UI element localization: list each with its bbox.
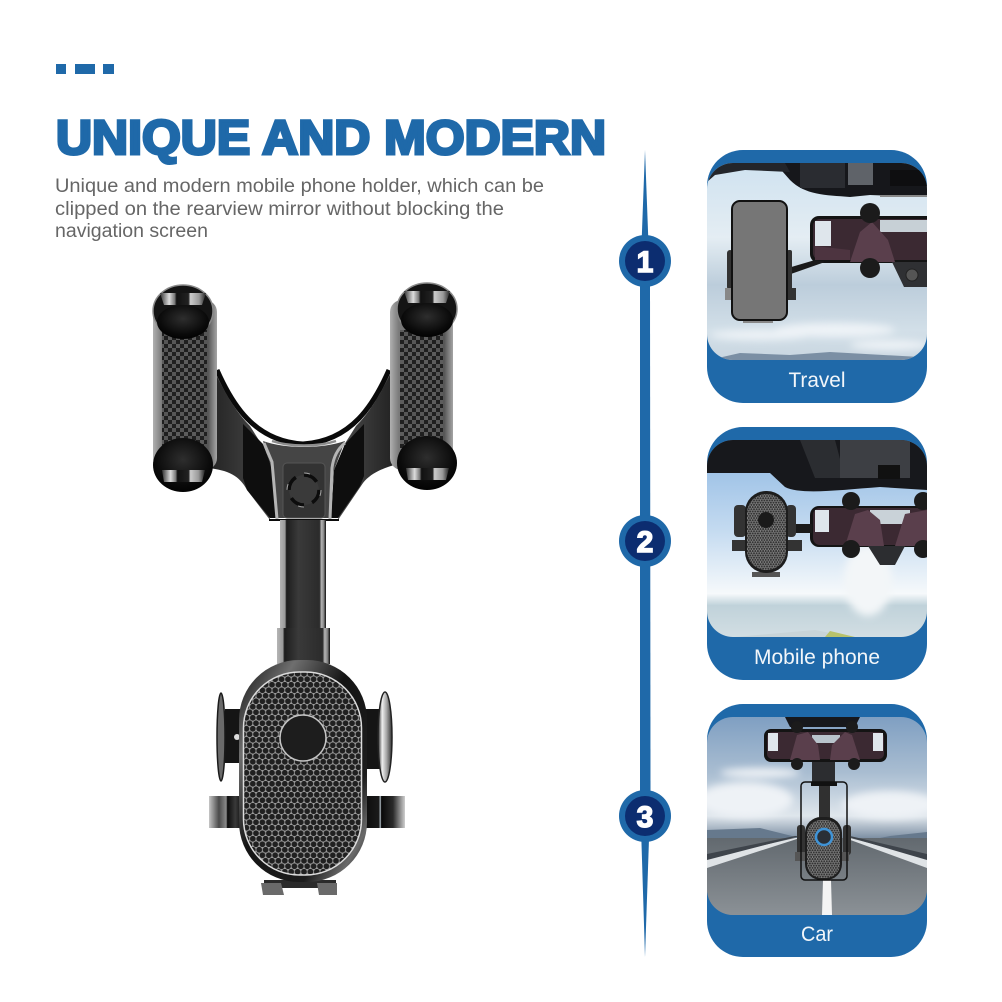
bottom right knob: [397, 436, 457, 490]
yoke inner rim: [217, 370, 389, 444]
card label: Car: [801, 923, 833, 946]
photo: phone holder without phone: [707, 440, 940, 637]
yoke left arm: [208, 366, 270, 520]
panel: mobile phone: [707, 427, 940, 680]
right lower tab: [365, 796, 405, 828]
yoke left dark inset: [243, 424, 276, 518]
bottom left knob: [153, 438, 213, 492]
arm collar: [277, 628, 330, 664]
right pad: [390, 300, 453, 470]
card label: Travel: [788, 369, 846, 392]
title: UNIQUE AND MODERN: [56, 112, 606, 165]
timeline spine: [640, 150, 650, 957]
yoke base line: [269, 519, 339, 521]
rim highlight: [272, 441, 336, 446]
panel: car: [697, 704, 938, 957]
top left knob: [153, 285, 213, 339]
card background: [707, 704, 927, 957]
step badge 3: 3: [637, 801, 653, 834]
step badge 2: [619, 515, 671, 567]
head outer rim: [239, 660, 367, 882]
right upper grip: [364, 692, 392, 782]
panel: travel: [707, 150, 940, 403]
bottom feet: [261, 880, 337, 895]
step badge 1: 1: [637, 246, 653, 279]
description text: clipped on the rearview mirror without blocking the: [55, 199, 504, 220]
center dial: [287, 473, 321, 507]
yoke silver trim: [264, 443, 345, 519]
description text: Unique and modern mobile phone holder, which can be: [55, 176, 544, 197]
top right knob: [397, 283, 457, 337]
yoke right arm: [338, 366, 398, 520]
photo: holder in car on highway: [697, 717, 938, 915]
description text: navigation screen: [55, 221, 208, 242]
description text: [55, 176, 544, 242]
left lower tab: [209, 796, 242, 828]
product: rearview mirror phone holder: [153, 283, 457, 895]
yoke right dark inset: [331, 424, 364, 518]
center button: [280, 715, 326, 761]
card background: [707, 427, 927, 680]
head dotted panel: [244, 672, 362, 875]
left upper grip: [217, 693, 243, 781]
decorative title marks: [56, 64, 114, 74]
photo: phone holder on mirror with phone: [707, 163, 940, 360]
telescopic arm: [280, 520, 326, 628]
left pad: [153, 300, 217, 470]
yoke center plate: [263, 441, 345, 518]
step badge 1: [619, 235, 671, 287]
card label: Mobile phone: [754, 646, 880, 669]
step badge 2: 2: [637, 526, 653, 559]
center square: [283, 463, 325, 518]
card background: [707, 150, 927, 403]
step badge 3: [619, 790, 671, 842]
